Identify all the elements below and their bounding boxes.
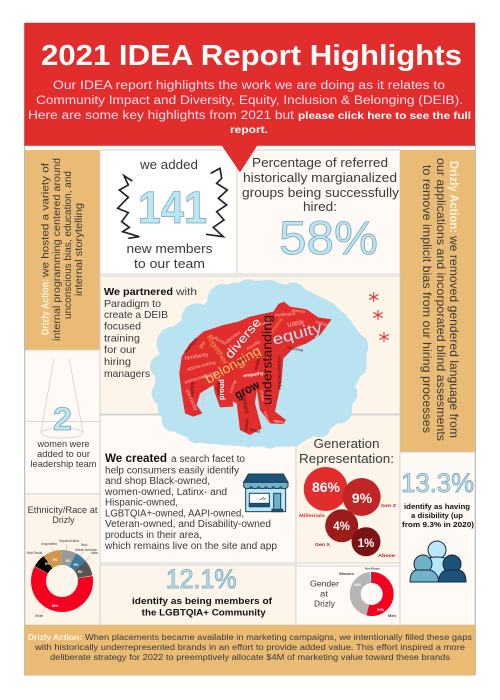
chart: ethnicity donut: Hispanic/Latino — [59, 539, 79, 543]
text: drizly action left copy — [40, 158, 85, 341]
illustration: word cloud bear: joy — [198, 339, 207, 350]
text: we created description — [104, 453, 278, 552]
illustration: word cloud bear: respect — [253, 354, 262, 371]
icon: spotlight — [26, 358, 100, 438]
text: drizly action bottom copy — [28, 632, 473, 662]
text: drizly action right copy: to remove implicit bias from our hiring processes — [420, 165, 434, 433]
text: intro paragraph — [28, 80, 471, 136]
text: we partnered with paradigm: Paradigm to — [104, 298, 161, 310]
chart: ethnicity donut: Black / — [81, 543, 88, 547]
text: we partnered with paradigm: hiring — [104, 356, 131, 368]
chart: ethnicity donut: 6% — [66, 559, 70, 563]
text: we partnered with paradigm — [104, 286, 197, 380]
chart: ethnicity donut — [27, 539, 98, 618]
illustration: word cloud bear — [179, 302, 332, 435]
text: drizly action bottom copy: deliberate strategy for 2022 to preemptively allocate $4M of marketing value toward these brands — [50, 652, 451, 662]
illustration: word cloud bear: familiarity — [184, 352, 209, 362]
chart: ethnicity donut: White — [35, 614, 43, 618]
chart: generation bubbles: Above — [378, 553, 395, 559]
illustration: word cloud bear: learn — [287, 318, 305, 330]
number: 12.1 percent: 12.1% — [166, 564, 237, 594]
text: new members to our team — [126, 242, 212, 271]
panel: disability stat — [400, 452, 475, 625]
panel: two women leaders — [25, 350, 100, 494]
heading: generation representation: Generation — [314, 437, 380, 451]
text: we created description: We created — [105, 453, 167, 465]
text: drizly action right copy — [420, 158, 461, 441]
illustration: word cloud bear: understanding — [260, 315, 275, 405]
chart: generation bubbles: Gen X — [315, 542, 331, 548]
text: percentage of referred: historically margianalized — [243, 170, 397, 185]
chart: ethnicity donut: 8% — [53, 558, 57, 562]
illustration: word cloud bear: motivated — [275, 311, 296, 318]
text: gender at drizly: Gender — [310, 579, 339, 589]
panel: generation representation — [296, 415, 400, 563]
illustration: word cloud bear: nurture — [183, 336, 199, 354]
text: percentage of referred: hired: — [303, 199, 337, 214]
text: we created description: help consumers easily identify — [105, 465, 239, 476]
text: identify as lgbtqia: the LGBTQIA+ Community — [142, 608, 266, 619]
illustration: word cloud bear: proud — [217, 379, 226, 400]
text: drizly action left copy: we hosted a variety of — [40, 163, 52, 278]
icon: red asterisks — [369, 292, 389, 342]
text: we partnered with paradigm: focused — [104, 320, 141, 332]
text: drizly action bottom copy: Drizly Action: — [28, 632, 82, 642]
text: we created description: and shop Black-owned, — [105, 476, 210, 487]
chart: generation bubbles: Gen Z — [381, 503, 396, 509]
illustration: word cloud bear: community — [268, 316, 284, 336]
title: 2021 IDEA Report Highlights — [41, 40, 462, 72]
text: drizly action left copy: Drizly Action: — [40, 279, 52, 335]
text: drizly action right copy: Drizly Action: — [447, 161, 461, 233]
panel: ethnicity race — [25, 494, 100, 625]
illustration: word cloud bear: voices — [262, 410, 271, 424]
illustration: word cloud bear: growth — [234, 355, 248, 364]
text: we created description: a search facet to — [171, 454, 246, 465]
chart: gender donut: Women — [339, 572, 354, 576]
chart: ethnicity donut: 5% — [45, 562, 49, 566]
text: women were added: added to our — [37, 449, 90, 460]
chart: gender donut: 54% — [377, 608, 385, 612]
illustration: word cloud bear: culture — [210, 333, 226, 345]
panel: we created search facet — [100, 415, 296, 563]
heading: ethnicity race at drizly: Ethnicity/Race at — [28, 505, 98, 516]
text: we created description: Veteran-owned, and Disability-owned — [105, 519, 271, 530]
illustration: word cloud bear: together — [205, 333, 231, 367]
illustration: word cloud bear: connect — [240, 393, 250, 414]
text: intro paragraph: please click here to see the full — [298, 110, 471, 122]
illustration: word cloud bear: supportive — [222, 330, 242, 346]
text: gender at drizly: Drizly — [314, 599, 336, 609]
heading: generation representation — [299, 437, 394, 466]
number: 58 percent: 58% — [279, 211, 378, 264]
panel: paradigm training — [100, 276, 400, 414]
panel: drizly action left — [25, 150, 100, 350]
illustration: word cloud bear: caring — [228, 379, 237, 394]
text: identify as having a disibility — [402, 502, 475, 529]
icon: storefront — [244, 474, 288, 512]
text: drizly action left copy: internal storytelling — [73, 203, 85, 296]
text: women were added — [30, 439, 97, 470]
illustration: word cloud bear: fairness — [256, 319, 270, 328]
illustration: word cloud bear: appreciating — [186, 360, 216, 372]
chart: generation bubbles: 4% — [333, 521, 350, 533]
panel: lgbtqia stat — [100, 564, 296, 625]
text: intro paragraph: report. — [230, 124, 268, 136]
text: we partnered with paradigm: We partnered — [104, 286, 173, 298]
panel: 141 new members — [100, 150, 237, 274]
panel: gender at drizly — [296, 566, 400, 625]
chart: ethnicity donut: Unspecified — [41, 542, 57, 546]
number: 13.3 percent: 13.3% — [401, 468, 474, 498]
illustration: word cloud bear: safety — [215, 381, 220, 395]
illustration: word cloud bear: appreciation — [277, 355, 283, 390]
illustration: word cloud bear: equality — [245, 339, 262, 351]
number: 141: 141 — [138, 182, 207, 233]
chart: generation bubbles — [299, 467, 396, 559]
text: intro paragraph: Here are some key highlights from 2021 but — [28, 110, 295, 122]
icon: zigzag laurels — [118, 168, 227, 238]
chart: ethnicity donut: 5% — [74, 563, 78, 567]
header banner — [24, 23, 475, 172]
text: gender at drizly: at — [320, 589, 329, 599]
text: identify as lgbtqia — [132, 596, 273, 619]
text: we partnered with paradigm: create a DEIB — [104, 309, 168, 321]
text: we created description: LGBTQIA+-owned, AAPI-owned, — [105, 509, 244, 520]
illustration: word cloud bear: variety — [189, 381, 194, 397]
text: drizly action right copy: we removed gendered language from — [447, 235, 461, 438]
chart: ethnicity donut: 8% — [78, 570, 82, 574]
chart: gender donut: 43% — [354, 583, 362, 587]
text: drizly action left copy: unconscious bias, education, and — [62, 171, 74, 319]
heading: ethnicity race at drizly — [28, 505, 98, 526]
illustration: word cloud bear: inclusive — [286, 344, 305, 353]
chart: gender donut: Non Binary — [365, 566, 380, 570]
illustration: word cloud bear: diverse — [222, 315, 264, 361]
text: we created description: products in their area, — [105, 530, 202, 541]
text: we partnered with paradigm: training — [104, 332, 140, 344]
text: we created description: which remains live on the site and app — [104, 541, 278, 552]
chart: generation bubbles: 1% — [358, 538, 374, 550]
illustration: word cloud bear: visibility — [315, 319, 330, 328]
illustration: word cloud bear: good — [250, 426, 261, 434]
chart: ethnicity donut: African American — [75, 548, 97, 552]
chart: generation bubbles: 9% — [352, 490, 373, 506]
chart: ethnicity donut: 66% — [52, 604, 58, 608]
text: percentage of referred: Percentage of referred — [252, 155, 388, 170]
illustration: word cloud bear: empathy — [243, 370, 264, 378]
text: new members to our team: to our team — [134, 257, 205, 271]
panel: drizly action bottom — [24, 625, 476, 675]
text: identify as lgbtqia: identify as being members of — [132, 596, 273, 607]
illustration: word cloud bear: belonging — [202, 343, 263, 387]
panel: 58 percent hired — [237, 150, 400, 274]
text: drizly action bottom copy: with historically underrepresented brands in an effort to provide added value. This effort inspired a more — [34, 642, 465, 652]
text: we created description: women-owned, Latinx- and — [104, 487, 227, 498]
heading: ethnicity race at drizly: Drizly — [52, 515, 75, 526]
shape: blue cloud — [150, 279, 368, 449]
text: drizly action left copy: internal programming centered around — [51, 158, 63, 341]
text: drizly action bottom copy: When placements became available in marketing campaigns, we intentionally filled these gaps — [85, 632, 473, 642]
panel: drizly action right — [400, 150, 475, 452]
heading: generation representation: Representation: — [299, 452, 394, 466]
chart: gender donut — [339, 566, 396, 618]
text: we partnered with paradigm: with — [175, 286, 197, 298]
illustration: word cloud bear: interesting — [184, 373, 209, 385]
illustration: word cloud bear: ethnicity — [184, 388, 199, 412]
text: percentage of referred: groups being successfully — [242, 185, 400, 200]
text: we partnered with paradigm: for our — [104, 344, 137, 356]
chart: generation bubbles: Millenials — [299, 513, 325, 519]
illustration: word cloud bear: kindness — [292, 308, 305, 314]
text: women were added: leadership team — [30, 459, 97, 470]
chart: ethnicity donut: Multi Racial — [27, 551, 42, 555]
chart: gender donut: Men — [388, 614, 396, 618]
panel: page frame — [24, 145, 476, 675]
decoration: cloud and bear — [150, 279, 368, 449]
illustration: word cloud bear: grow — [232, 378, 262, 402]
text: drizly action right copy: our applications and incorporated blind assesments — [434, 158, 448, 441]
text: new members to our team: new members — [126, 242, 212, 256]
icon: three people — [410, 541, 466, 582]
text: gender at drizly — [310, 579, 339, 609]
text: identify as having a disibility: identify as having — [404, 502, 470, 511]
text: intro paragraph: Community Impact and Diversity, Equity, Inclusion & Belonging (DEIB). — [36, 95, 463, 107]
illustration: word cloud bear: equity — [271, 319, 324, 349]
text: we partnered with paradigm: managers — [104, 368, 150, 380]
illustration: word cloud bear: trusting — [202, 370, 216, 379]
text: we added: we added — [139, 158, 198, 172]
illustration: word cloud bear: changes — [243, 418, 249, 432]
number: 2: 2 — [53, 401, 72, 437]
text: intro paragraph: Our IDEA report highlights the work we are doing as it relates to — [53, 80, 445, 92]
illustration: word cloud bear: honest — [199, 392, 207, 407]
illustration: word cloud bear: share — [259, 389, 266, 403]
text: identify as having a disibility: from 9.3% in 2020) — [402, 520, 475, 529]
text: percentage of referred — [242, 155, 400, 214]
text: we created description: Hispanic-owned, — [105, 498, 178, 509]
text: identify as having a disibility: a disibility (up — [411, 511, 463, 520]
text: women were added: women were — [37, 439, 90, 450]
chart: generation bubbles: 86% — [312, 479, 341, 495]
chart: ethnicity donut: Asian — [91, 551, 98, 555]
illustration: word cloud bear: open — [273, 419, 284, 424]
